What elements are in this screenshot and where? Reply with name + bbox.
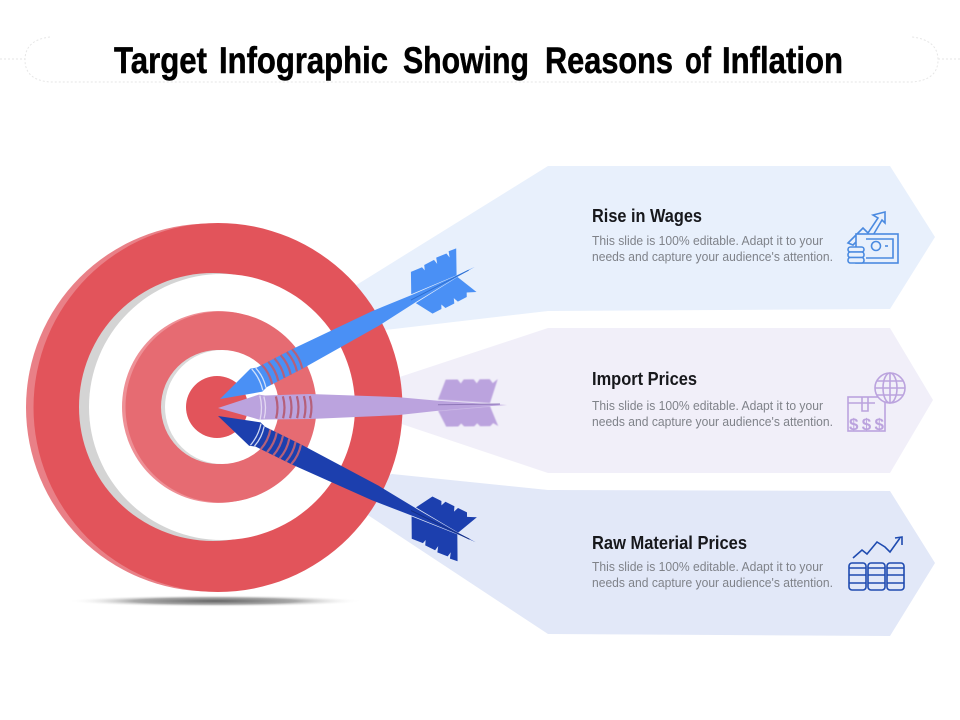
target shadow bbox=[67, 595, 363, 607]
panel: rise in wages bbox=[300, 166, 935, 340]
icon: globe and box with dollars: $$$ bbox=[849, 415, 885, 434]
panel: import prices bbox=[330, 328, 933, 473]
heading: import prices: Import Prices bbox=[592, 368, 697, 389]
panel: raw material prices bbox=[330, 474, 935, 636]
text: rise in wages description: needs and capture your audience's attention. bbox=[592, 249, 833, 264]
title: of bbox=[685, 40, 711, 81]
icon: barrels and chart line bbox=[849, 537, 904, 590]
heading: raw material prices: Raw Material Prices bbox=[592, 532, 747, 553]
target bbox=[26, 223, 402, 592]
text: rise in wages description: This slide is 100% editable. Adapt it to your bbox=[592, 233, 824, 248]
title: Reasons bbox=[545, 40, 673, 81]
title: Showing bbox=[403, 40, 529, 81]
text: raw material prices description: needs and capture your audience's attention. bbox=[592, 575, 833, 590]
title: Inflation bbox=[722, 40, 843, 81]
text: import prices description: This slide is 100% editable. Adapt it to your bbox=[592, 398, 824, 413]
heading: rise in wages: Rise in Wages bbox=[592, 205, 702, 226]
text: raw material prices description bbox=[592, 559, 833, 590]
arrow: dark blue bbox=[207, 395, 486, 566]
arrow: light blue bbox=[208, 244, 485, 419]
title: Target bbox=[114, 40, 207, 81]
text: import prices description: needs and capture your audience's attention. bbox=[592, 414, 833, 429]
icon: globe and box with dollars bbox=[848, 373, 905, 434]
text: raw material prices description: This slide is 100% editable. Adapt it to your bbox=[592, 559, 824, 574]
title bbox=[114, 40, 843, 81]
arrow: purple bbox=[218, 379, 507, 429]
text: import prices description bbox=[592, 398, 833, 429]
icon: money and rising arrow bbox=[848, 212, 898, 263]
text: rise in wages description bbox=[592, 233, 833, 264]
title frame bbox=[0, 37, 960, 82]
title: Infographic bbox=[219, 40, 388, 81]
